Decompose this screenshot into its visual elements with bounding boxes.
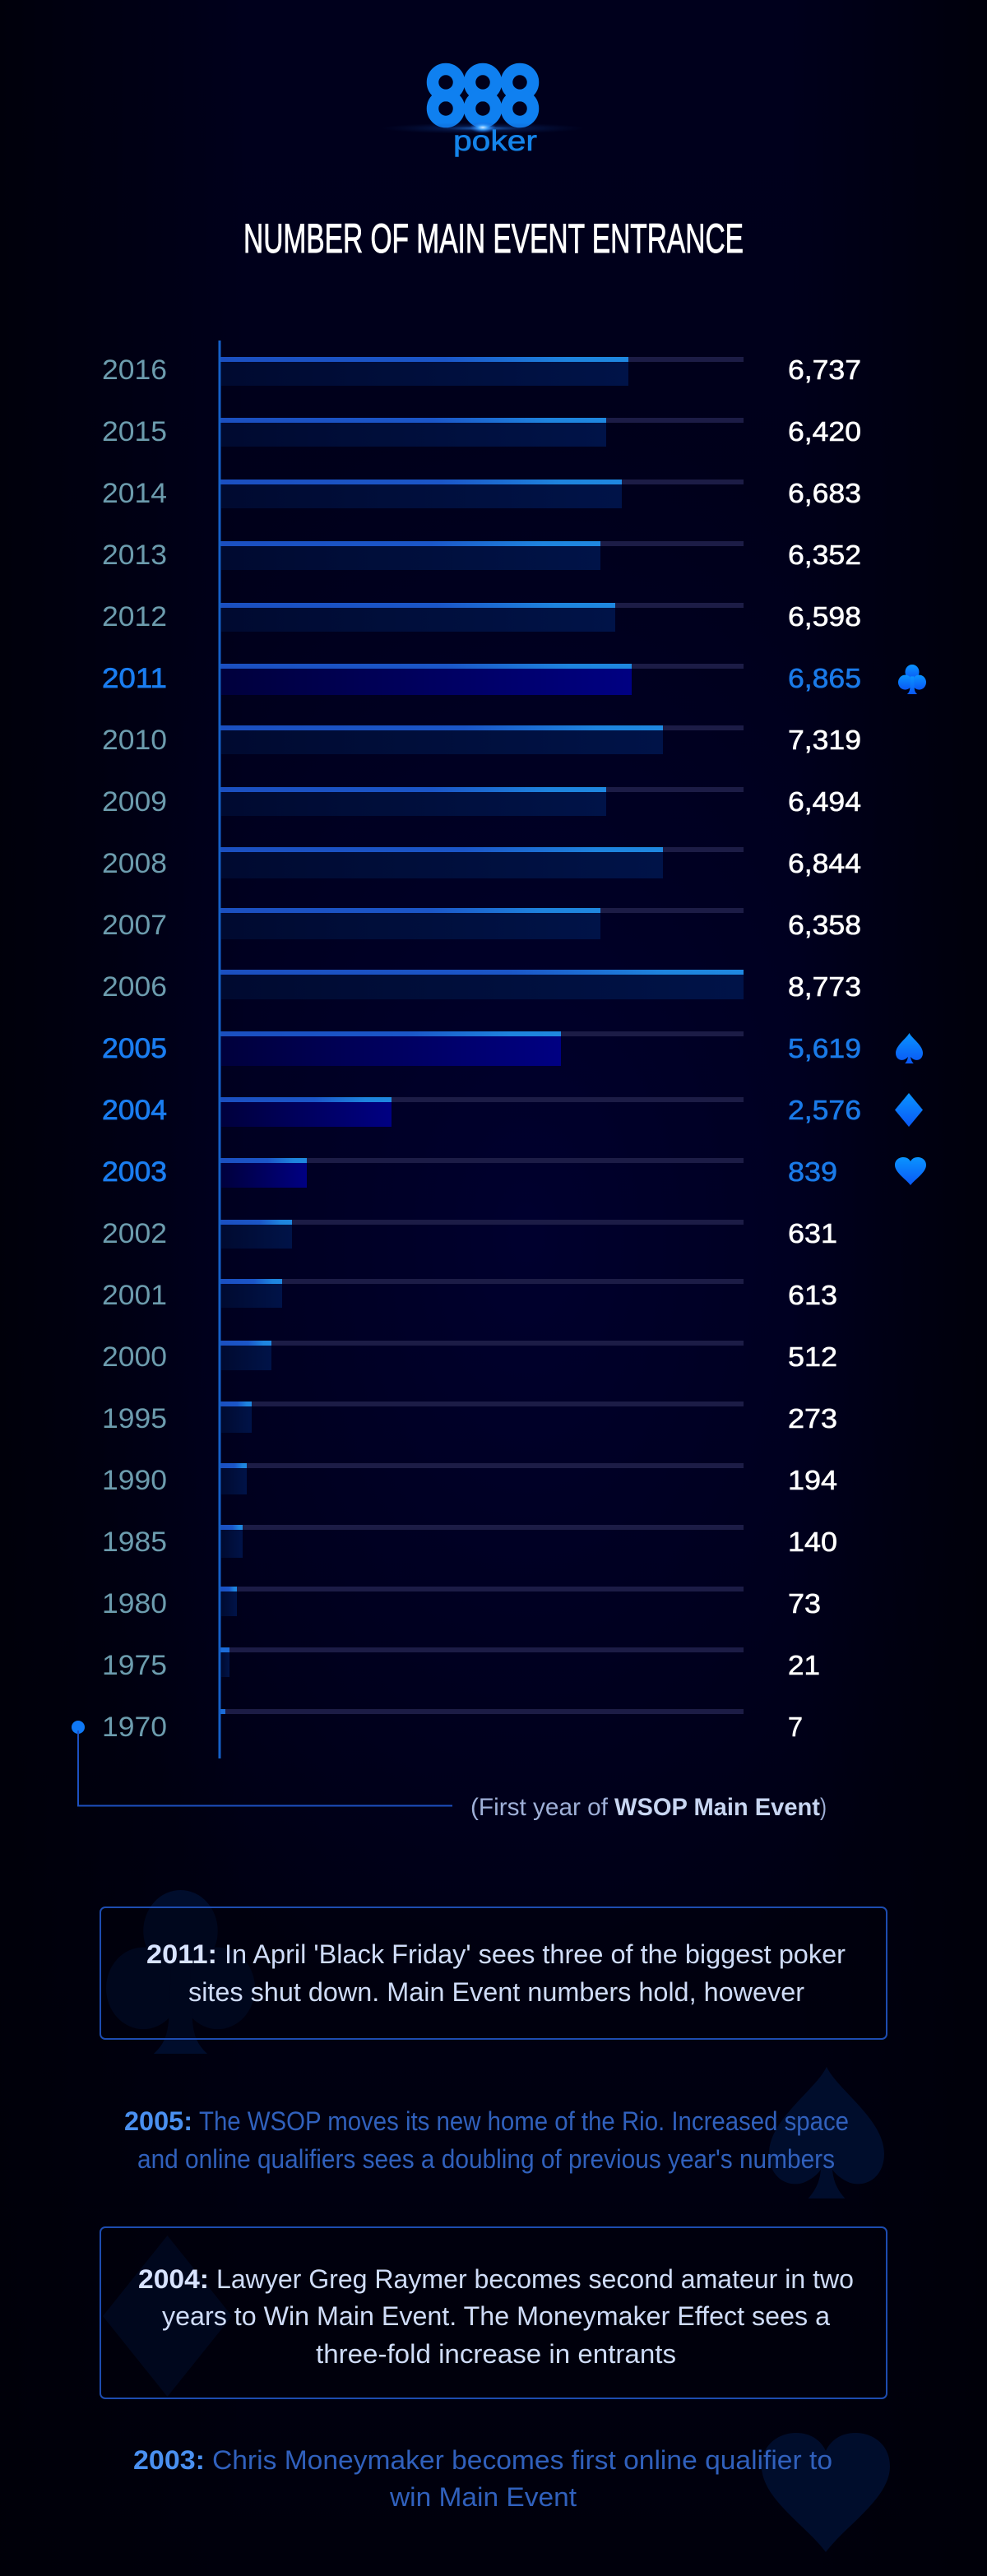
row 1990: 194 — [788, 1465, 837, 1495]
text block: 2003 note: Chris Moneymaker becomes first online qualifier to — [212, 2445, 832, 2475]
text block: 2005 note: The WSOP moves its new home of the Rio. Increased space — [199, 2106, 849, 2136]
row 2016: 6,737 — [788, 354, 861, 385]
row 2007: 2007 — [102, 910, 167, 941]
row 2015 — [102, 416, 861, 447]
icon: spade — [896, 1033, 923, 1063]
logo: 888poker: poker — [453, 125, 537, 157]
panel: 2004 note — [100, 2227, 887, 2398]
icon: club — [898, 665, 926, 694]
row 2006 — [102, 970, 861, 1003]
row 2010 — [102, 725, 861, 756]
row 2000: 2000 — [102, 1341, 167, 1373]
row 2006: 2006 — [102, 971, 167, 1003]
row 1985: 140 — [788, 1527, 837, 1557]
row 2012 — [102, 601, 861, 632]
panel: 2011 note: sites shut down. Main Event numbers hold, however — [188, 1977, 804, 2007]
row 2014: 2014 — [102, 478, 167, 509]
panel: 2011 note — [100, 1907, 887, 2039]
row 2013: 6,352 — [788, 540, 861, 570]
row 2005 highlighted — [102, 1031, 861, 1066]
row 2006: 8,773 — [788, 971, 861, 1002]
row 2015: 6,420 — [788, 416, 861, 447]
row 2012: 6,598 — [788, 601, 861, 632]
row 2012: 2012 — [102, 601, 167, 632]
first year callout: (First year of — [470, 1794, 609, 1821]
icon: heart — [895, 1157, 926, 1185]
text block: 2005 note: 2005: — [124, 2106, 192, 2136]
row 1970: 7 — [788, 1712, 803, 1742]
row 1970: 1970 — [102, 1712, 167, 1743]
background suit: heart — [762, 2433, 890, 2552]
row 1995: 273 — [788, 1403, 837, 1434]
row 2009: 2009 — [102, 786, 167, 818]
row 1985 — [102, 1525, 837, 1558]
row 2001: 2001 — [102, 1280, 167, 1311]
row 2011 highlighted: 2011 — [102, 663, 167, 694]
row 1970 — [102, 1709, 803, 1743]
chart axis — [219, 341, 220, 1758]
row 2004 highlighted: 2,576 — [788, 1095, 861, 1125]
row 2003 highlighted: 839 — [788, 1156, 837, 1187]
row 2011 highlighted: 6,865 — [788, 663, 861, 693]
row 2001: 613 — [788, 1280, 837, 1310]
row 2004 highlighted — [102, 1095, 861, 1127]
row 1995 — [102, 1402, 837, 1434]
icon: diamond — [895, 1093, 923, 1127]
row 1980: 1980 — [102, 1588, 167, 1619]
row 1985: 1985 — [102, 1527, 167, 1558]
row 2014 — [102, 478, 861, 509]
row 2002: 2002 — [102, 1218, 167, 1249]
row 1980: 73 — [788, 1588, 821, 1619]
row 1975: 21 — [788, 1650, 820, 1680]
row 2013: 2013 — [102, 540, 167, 571]
bar chart: main event entrants — [102, 341, 861, 1758]
row 2000: 512 — [788, 1341, 837, 1372]
row 2002 — [102, 1218, 837, 1249]
panel: 2011 note: In April 'Black Friday' sees three of the biggest poker — [225, 1939, 846, 1969]
text block: 2003 note: win Main Event — [389, 2482, 577, 2512]
row 2011 highlighted — [102, 663, 861, 695]
row 2008: 6,844 — [788, 848, 861, 878]
row 1995: 1995 — [102, 1403, 167, 1434]
row 2003 highlighted — [102, 1156, 837, 1188]
row 2010: 2010 — [102, 725, 167, 756]
row 2000 — [102, 1341, 837, 1373]
row 2014: 6,683 — [788, 478, 861, 508]
title: NUMBER OF MAIN EVENT ENTRANCE — [243, 215, 744, 262]
panel: 2004 note: 2004: — [138, 2264, 209, 2294]
row 2013 — [102, 540, 861, 571]
row 2004 highlighted: 2004 — [102, 1095, 167, 1126]
first year callout: WSOP Main Event — [614, 1794, 820, 1821]
row 2005 highlighted: 5,619 — [788, 1033, 861, 1063]
row 2007: 6,358 — [788, 910, 861, 940]
background suit: diamond — [103, 2235, 232, 2397]
text block: 2005 note: and online qualifiers sees a doubling of previous year's numbers — [137, 2144, 835, 2174]
row 1990 — [102, 1463, 837, 1496]
row 2001 — [102, 1279, 837, 1311]
text block: 2005 note — [124, 2106, 849, 2174]
panel: 2011 note: 2011: — [146, 1939, 217, 1969]
row 1975 — [102, 1647, 820, 1681]
panel: 2004 note: years to Win Main Event. The Moneymaker Effect sees a — [162, 2301, 830, 2331]
row 1990: 1990 — [102, 1465, 167, 1496]
row 2005 highlighted: 2005 — [102, 1033, 167, 1064]
first year callout — [72, 1721, 827, 1821]
row 2008: 2008 — [102, 848, 167, 879]
panel: 2004 note: three-fold increase in entrants — [316, 2339, 676, 2369]
background suit: club — [106, 1890, 255, 2054]
row 2009 — [102, 786, 861, 818]
logo: 888poker — [380, 69, 586, 157]
row 2016 — [102, 354, 861, 386]
background suit: spade — [769, 2067, 884, 2198]
row 2010: 7,319 — [788, 725, 861, 755]
row 2015: 2015 — [102, 416, 167, 447]
row 2008 — [102, 847, 861, 879]
row 2003 highlighted: 2003 — [102, 1156, 167, 1188]
first year callout: ) — [820, 1794, 827, 1821]
row 2016: 2016 — [102, 354, 167, 386]
row 2009: 6,494 — [788, 786, 861, 817]
row 1975: 1975 — [102, 1650, 167, 1681]
text block: 2003 note: 2003: — [133, 2445, 205, 2475]
panel: 2004 note: Lawyer Greg Raymer becomes second amateur in two — [216, 2264, 854, 2294]
text block: 2003 note — [133, 2445, 832, 2512]
row 2002: 631 — [788, 1218, 837, 1249]
row 2007 — [102, 908, 861, 941]
row 1980 — [102, 1587, 821, 1619]
